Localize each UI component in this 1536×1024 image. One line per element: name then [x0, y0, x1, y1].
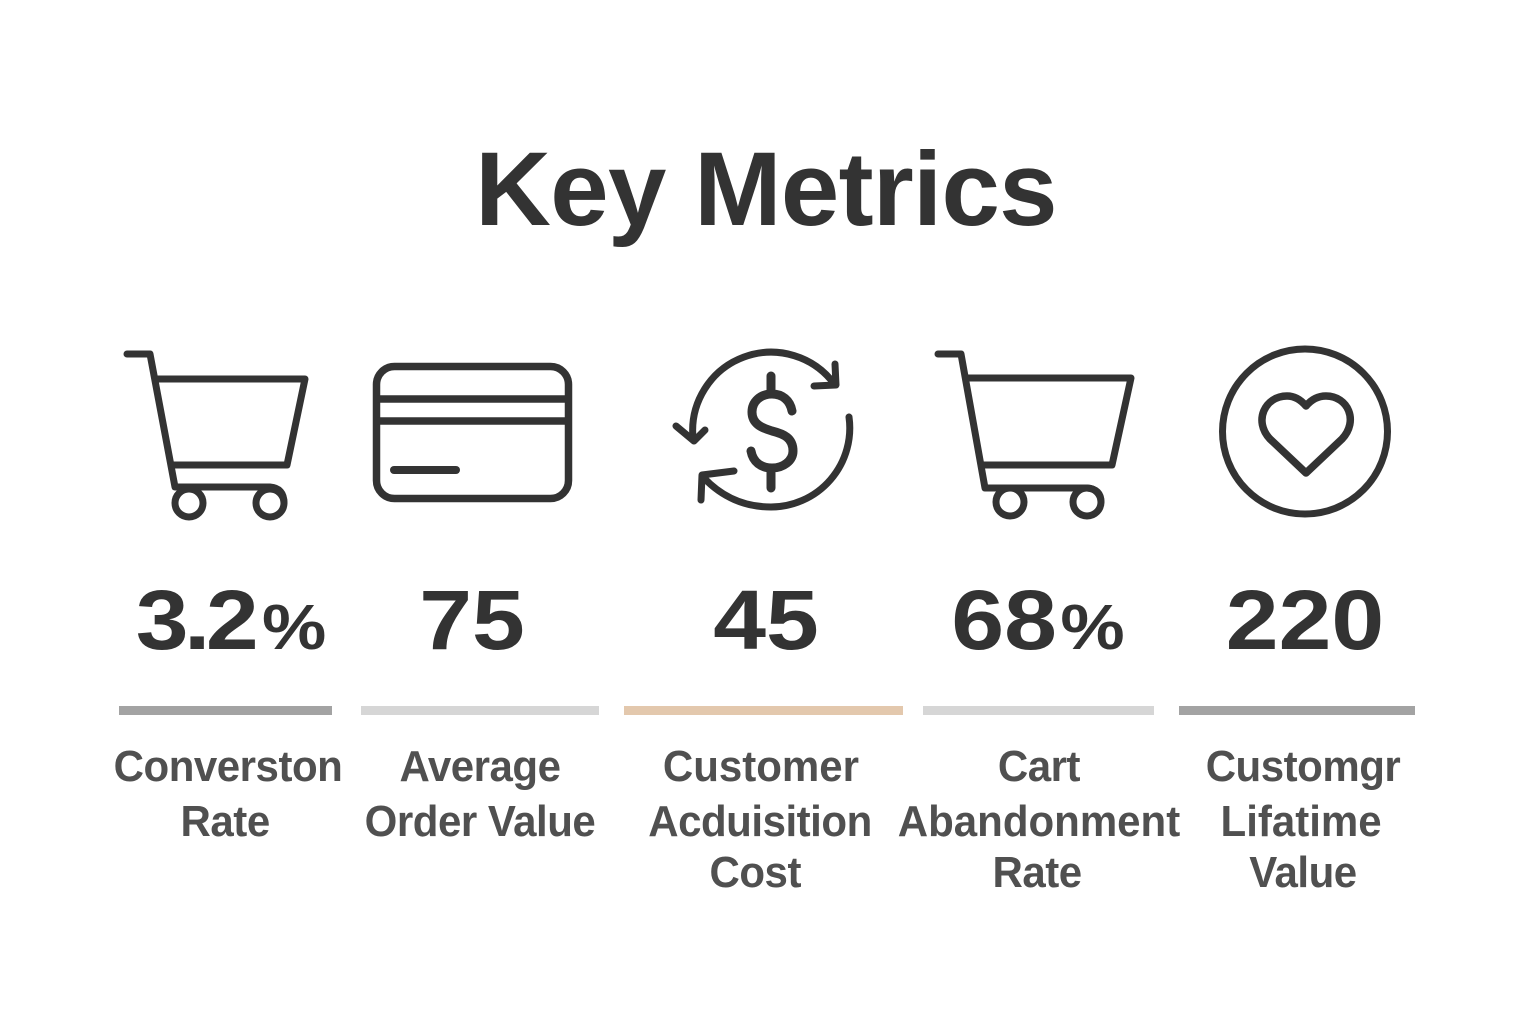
divider: customer lifetime value — [1179, 706, 1415, 715]
label: customer lifetime value: Customgr — [1206, 742, 1400, 791]
label: average order value: Average — [400, 742, 560, 791]
divider: conversion rate — [119, 706, 332, 715]
value: customer lifetime value: 220 — [1226, 573, 1384, 667]
value: average order value: 75 — [419, 573, 525, 667]
icon: dollar cycle — [676, 352, 850, 507]
label: cart abandonment rate: Cart — [998, 742, 1080, 791]
divider: average order value — [361, 706, 599, 715]
label: average order value — [365, 742, 595, 846]
label: conversion rate: Converston — [114, 742, 342, 791]
label: customer acquisition cost: Customer — [663, 742, 859, 791]
icon: heart in circle — [1222, 349, 1388, 514]
icon: credit card — [376, 366, 568, 498]
icon: shopping cart — [127, 354, 305, 517]
label: customer lifetime value: Lifatime — [1221, 797, 1382, 846]
label: conversion rate: Rate — [181, 797, 270, 846]
value: conversion rate: 3.2% — [136, 573, 326, 667]
label: conversion rate — [114, 742, 342, 846]
label: cart abandonment rate: Abandonment — [898, 797, 1180, 846]
label: cart abandonment rate: Rate — [992, 848, 1082, 897]
value: customer acquisition cost: 45 — [713, 573, 819, 667]
divider: cart abandonment rate — [923, 706, 1154, 715]
label: customer acquisition cost — [648, 742, 872, 897]
label: cart abandonment rate — [898, 742, 1180, 897]
label: customer lifetime value — [1206, 742, 1400, 897]
label: customer acquisition cost: Acduisition — [648, 797, 872, 846]
icon: abandoned cart — [938, 354, 1131, 516]
divider: customer acquisition cost — [624, 706, 903, 715]
label: average order value: Order Value — [365, 797, 595, 846]
value: cart abandonment rate: 68% — [951, 573, 1125, 667]
title: Key Metrics — [475, 131, 1057, 248]
label: customer acquisition cost: Cost — [709, 848, 801, 897]
label: customer lifetime value: Value — [1249, 848, 1357, 897]
